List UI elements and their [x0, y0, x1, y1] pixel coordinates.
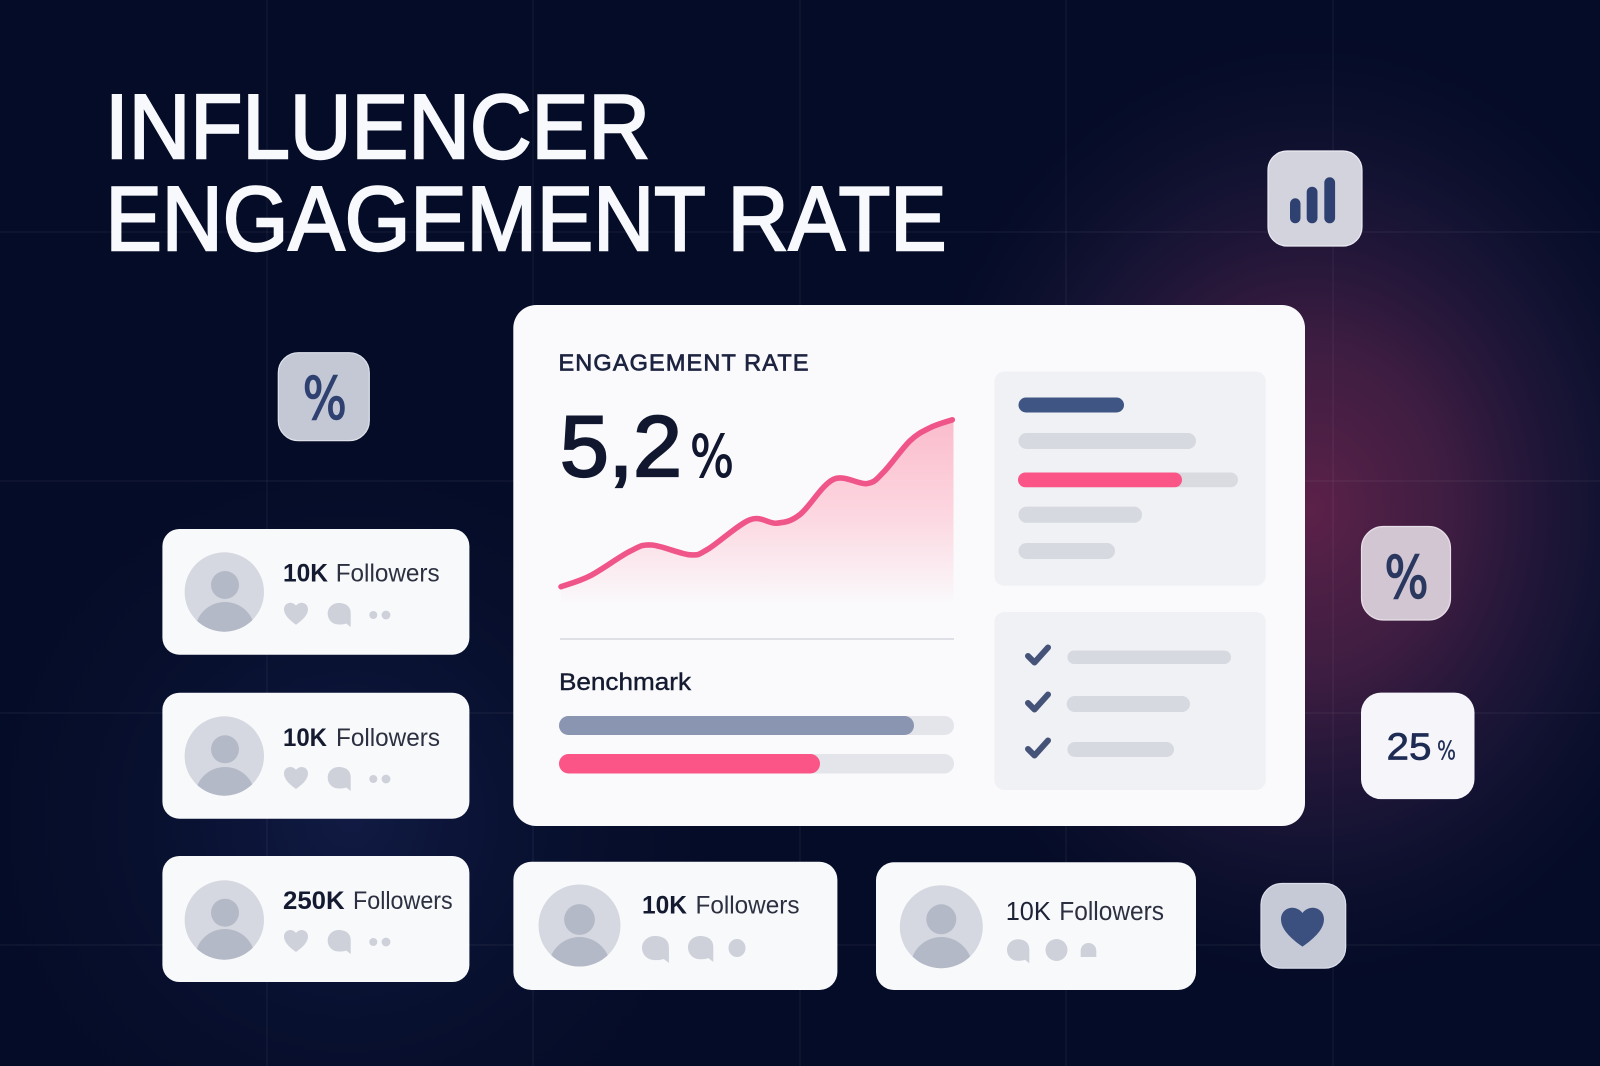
- title: INFLUENCER: [105, 77, 650, 178]
- panel: checklist: [994, 612, 1266, 790]
- follower count: Followers: [336, 560, 440, 588]
- follower count: 10K: [283, 724, 327, 752]
- influencer card 3: [162, 856, 469, 989]
- benchmark bar: slate: [559, 716, 954, 735]
- reaction icons: [284, 767, 390, 791]
- big value 5,2%: 5,2: [560, 399, 682, 495]
- reaction icons: [642, 936, 746, 963]
- follower count: [283, 560, 440, 588]
- follower count: [283, 724, 440, 752]
- title: ENGAGEMENT RATE: [106, 169, 946, 270]
- big value 5,2%: %: [690, 422, 734, 490]
- influencer card 4: [513, 862, 837, 999]
- check row 2: [1028, 694, 1190, 712]
- card label: engagement rate: ENGAGEMENT RATE: [558, 350, 808, 376]
- badge: 25 percent: [1361, 693, 1474, 799]
- icon: percent badge right: [1362, 526, 1450, 620]
- follower count: Followers: [696, 891, 800, 919]
- check row 1: [1028, 648, 1231, 664]
- influencer card 5: [876, 862, 1196, 999]
- influencer card 2: [162, 693, 469, 827]
- avatar: [900, 885, 983, 968]
- badge: 25 percent: 25: [1386, 726, 1432, 768]
- follower count: [642, 891, 800, 919]
- follower count: [1006, 898, 1164, 926]
- follower count: 10K: [283, 560, 328, 588]
- follower count: Followers: [353, 887, 453, 915]
- panel: placeholder list: [994, 372, 1266, 586]
- follower count: 10K: [1006, 898, 1051, 926]
- follower count: 250K: [283, 887, 345, 915]
- avatar: [538, 884, 620, 966]
- icon: percent badge right: %: [1384, 544, 1428, 612]
- badge: 25 percent: %: [1437, 736, 1456, 766]
- benchmark bar: pink: [559, 754, 954, 774]
- benchmark label: Benchmark: [559, 669, 692, 696]
- influencer card 1: [162, 529, 469, 662]
- follower count: [283, 887, 453, 915]
- icon: percent badge left: %: [303, 364, 347, 432]
- check row 3: [1028, 740, 1174, 757]
- line chart: [561, 420, 954, 606]
- follower count: 10K: [642, 891, 687, 919]
- reaction icons: [284, 603, 390, 627]
- reaction icons: [1007, 939, 1096, 963]
- icon: heart badge: [1261, 884, 1346, 968]
- avatar: [184, 880, 264, 960]
- icon: percent badge left: [278, 353, 369, 441]
- avatar: [184, 552, 264, 632]
- avatar: [184, 716, 264, 796]
- follower count: Followers: [1059, 898, 1164, 926]
- reaction icons: [284, 930, 390, 954]
- follower count: Followers: [336, 724, 440, 752]
- panel: main dashboard card: [513, 305, 1305, 826]
- icon: bar chart badge: [1268, 151, 1362, 246]
- big value 5,2%: [560, 399, 734, 495]
- title: [105, 77, 946, 270]
